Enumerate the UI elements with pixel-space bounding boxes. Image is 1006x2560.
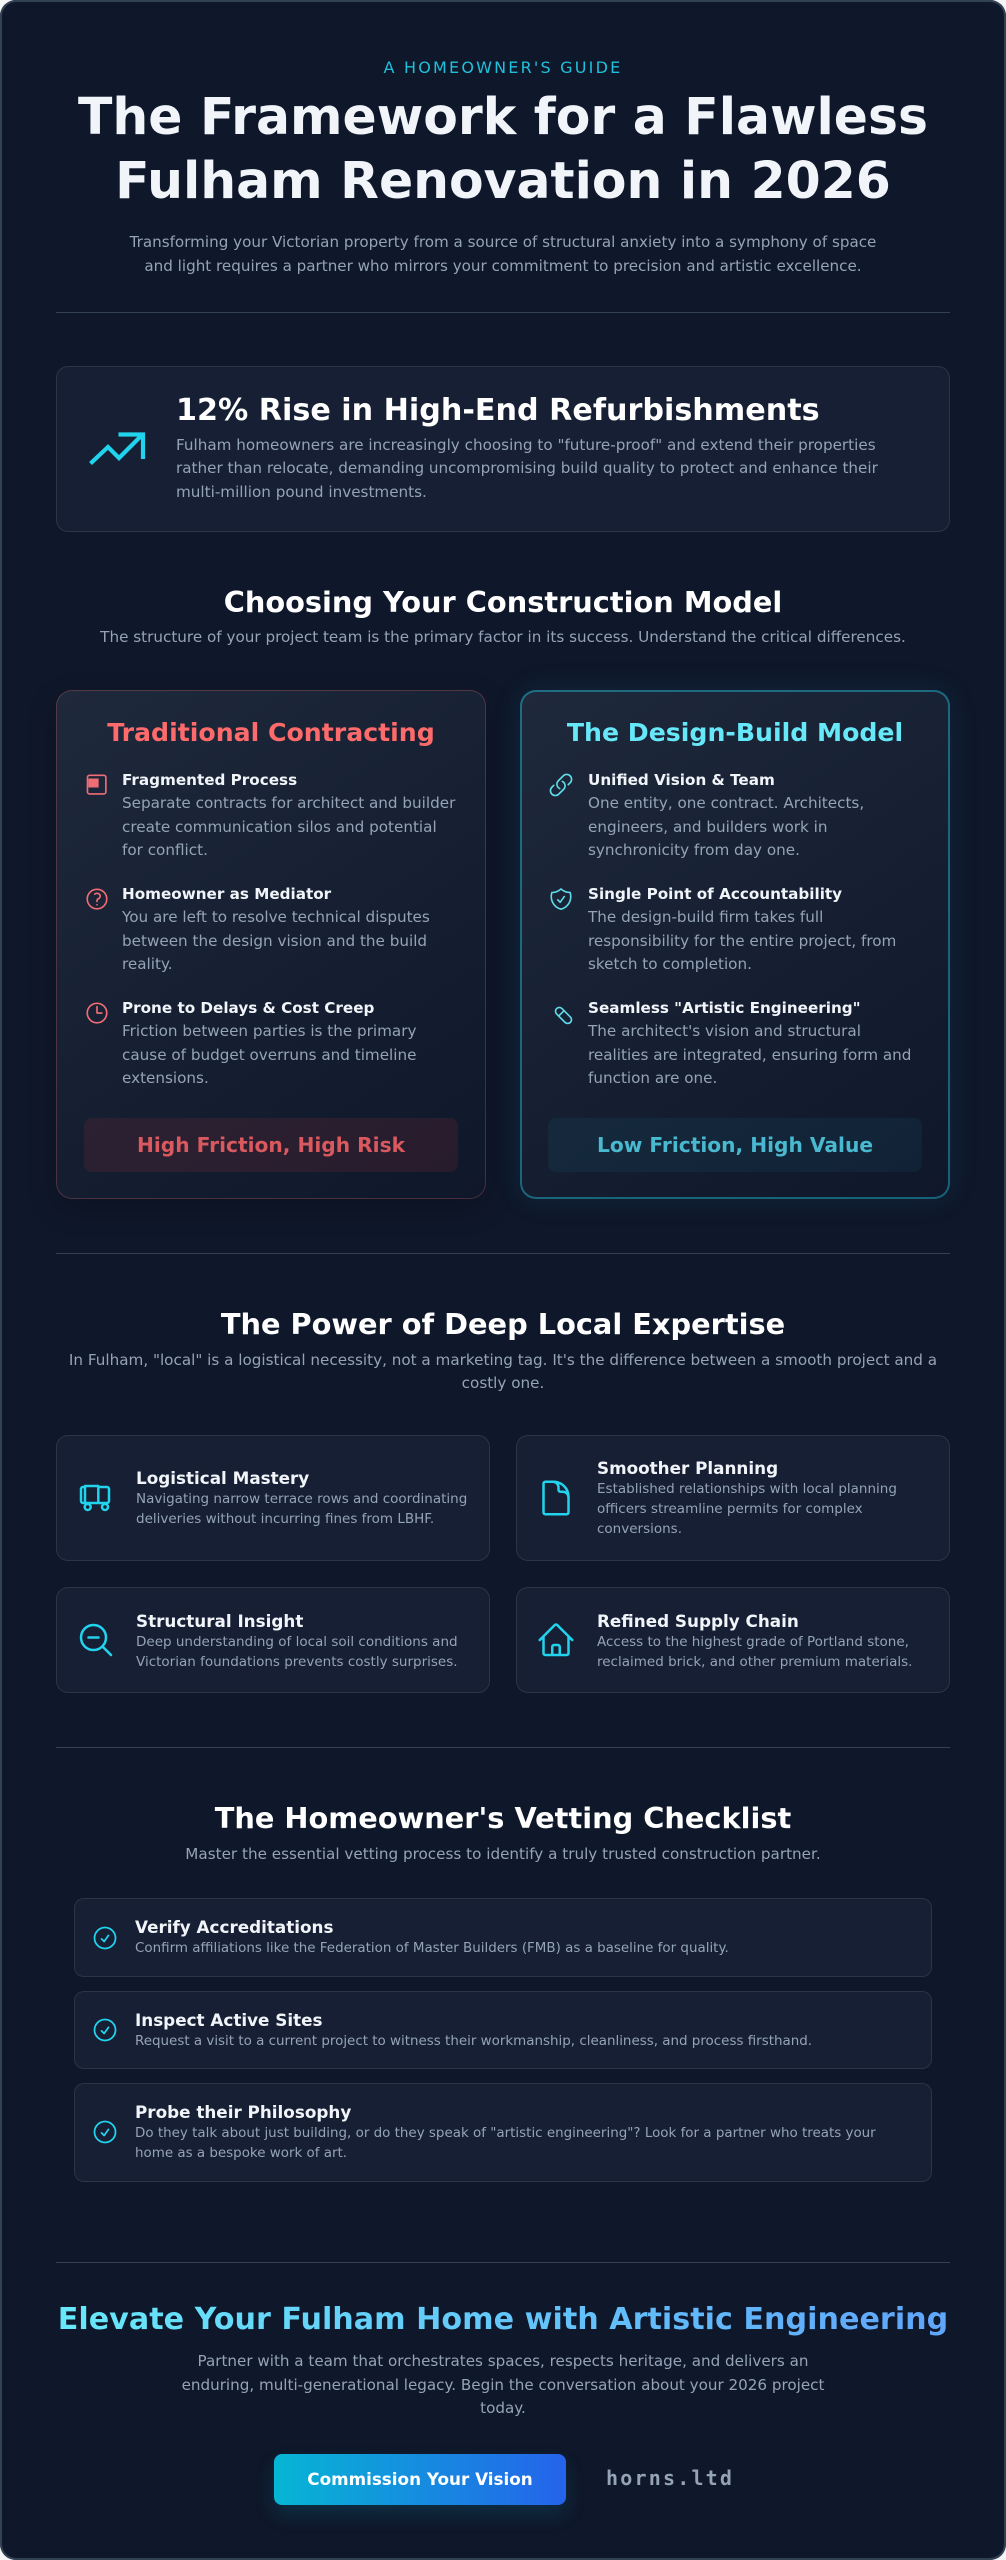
item: single point of accountability: [550, 885, 896, 973]
item: single point of accountability: The design-build firm takes full: [588, 908, 823, 926]
item: fragmented process: for conflict.: [122, 841, 208, 859]
intro text: [130, 233, 876, 274]
panel: logistical mastery: deliveries without incurring fines from LBHF.: [136, 1511, 434, 1527]
panel: logistical mastery: Logistical Mastery: [136, 1468, 309, 1488]
statistic description: rather than relocate, demanding uncompromising build quality to protect and enhance their: [176, 459, 878, 477]
statistic description: multi-million pound investments.: [176, 483, 427, 501]
item: fragmented process: create communication silos and potential: [122, 818, 437, 836]
checklist item: probe their philosophy: home as a bespoke work of art.: [135, 2146, 347, 2161]
heading: local expertise: The Power of Deep Local Expertise: [221, 1307, 785, 1341]
intro text: Transforming your Victorian property from a source of structural anxiety into a symphony of space: [130, 233, 876, 251]
checklist item: inspect active sites: Request a visit to a current project to witness their workmanship, cleanliness, and process firsthand.: [135, 2034, 812, 2049]
statistic description: Fulham homeowners are increasingly choosing to "future-proof" and extend their properties: [176, 436, 876, 454]
item: fragmented process: [86, 771, 456, 859]
statistic description: [176, 436, 878, 501]
panel: refined supply chain: [516, 1587, 950, 1693]
panel: refined supply chain: Access to the highest grade of Portland stone,: [597, 1634, 909, 1650]
panel: structural insight: Victorian foundations prevents costly surprises.: [136, 1654, 458, 1670]
badge: low friction: Low Friction, High Value: [597, 1133, 873, 1157]
panel: refined supply chain: Refined Supply Chain: [597, 1611, 799, 1631]
item: unified vision: [550, 771, 864, 859]
statistic heading: 12% Rise in High-End Refurbishments: [176, 393, 820, 428]
item: homeowner as mediator: reality.: [122, 955, 173, 973]
item: delays and cost creep: cause of budget overruns and timeline: [122, 1046, 416, 1064]
heading: vetting checklist: The Homeowner's Vetting Checklist: [215, 1801, 791, 1835]
panel: smoother planning: officers streamline permits for complex: [597, 1501, 863, 1517]
panel: structural insight: Deep understanding of local soil conditions and: [136, 1634, 458, 1650]
icon: trending up arrow: [89, 432, 146, 465]
icon: fragmented: [86, 774, 107, 795]
panel: smoother planning: [516, 1435, 950, 1561]
item: homeowner as mediator: between the design vision and the build: [122, 932, 427, 950]
icon: pill: [554, 1006, 572, 1024]
call to action text: today.: [480, 2399, 526, 2417]
panel: structural insight: Structural Insight: [136, 1611, 303, 1631]
item: delays and cost creep: Prone to Delays & Cost Creep: [122, 999, 374, 1017]
panel: smoother planning: conversions.: [597, 1521, 682, 1537]
brand wordmark: horns.ltd: [606, 2466, 734, 2490]
call to action text: [182, 2352, 824, 2417]
item: artistic engineering: The architect's vision and structural: [588, 1022, 861, 1040]
icon: house: [538, 1623, 574, 1656]
call to action text: enduring, multi-generational legacy. Begin the conversation about your 2026 project: [182, 2376, 824, 2394]
item: unified vision: engineers, and builders work in: [588, 818, 827, 836]
icon: link: [550, 774, 572, 796]
item: artistic engineering: Seamless "Artistic Engineering": [588, 999, 861, 1017]
icon: check circle: [94, 2018, 116, 2042]
checklist item: probe their philosophy: [74, 2083, 932, 2182]
eyebrow: A HOMEOWNER'S GUIDE: [384, 58, 622, 76]
intro text: and light requires a partner who mirrors your commitment to precision and artistic excellence.: [144, 256, 862, 274]
checklist item: inspect active sites: [74, 1991, 932, 2069]
heading: traditional contracting: Traditional Contracting: [107, 718, 435, 747]
icon: shield check: [550, 888, 572, 910]
icon: check circle: [94, 1926, 116, 1950]
item: unified vision: One entity, one contract. Architects,: [588, 794, 864, 812]
panel: structural insight: [56, 1587, 490, 1693]
icon: check circle: [94, 2120, 116, 2144]
item: artistic engineering: function are one.: [588, 1069, 717, 1087]
checklist item: verify accreditations: [74, 1898, 932, 1977]
subheading: local expertise: [69, 1351, 937, 1392]
panel: smoother planning: Established relationships with local planning: [597, 1481, 897, 1497]
panel: design-build model: [520, 690, 950, 1199]
panel: logistical mastery: Navigating narrow terrace rows and coordinating: [136, 1491, 467, 1507]
panel: logistical mastery: [56, 1435, 490, 1561]
button: commission your vision: [274, 2454, 566, 2505]
checklist item: verify accreditations: Confirm affiliations like the Federation of Master Builders (FMB) as a baseline for quality.: [135, 1941, 729, 1956]
call to action text: Partner with a team that orchestrates spaces, respects heritage, and delivers an: [198, 2352, 808, 2370]
item: fragmented process: Separate contracts for architect and builder: [122, 794, 455, 812]
panel: traditional contracting: [56, 690, 486, 1199]
item: unified vision: Unified Vision & Team: [588, 771, 775, 789]
item: unified vision: synchronicity from day one.: [588, 841, 800, 859]
item: homeowner as mediator: [86, 885, 430, 973]
checklist item: probe their philosophy: Do they talk about just building, or do they speak of "artistic engineering"? Look for a partner who treats your: [135, 2126, 876, 2141]
icon: question mark: [86, 888, 108, 910]
badge: high friction: High Friction, High Risk: [137, 1133, 405, 1157]
item: delays and cost creep: extensions.: [122, 1069, 209, 1087]
title: The Framework for a Flawless: [78, 87, 928, 146]
icon: document: [542, 1480, 570, 1516]
item: delays and cost creep: Friction between parties is the primary: [122, 1022, 416, 1040]
item: artistic engineering: [554, 999, 911, 1087]
icon: clock: [86, 1002, 108, 1024]
subheading: local expertise: costly one.: [462, 1374, 544, 1392]
item: single point of accountability: responsibility for the entire project, from: [588, 932, 896, 950]
title: Fulham Renovation in 2026: [115, 151, 891, 210]
item: artistic engineering: realities are integrated, ensuring form and: [588, 1046, 911, 1064]
item: single point of accountability: sketch to completion.: [588, 955, 752, 973]
subheading: vetting checklist: Master the essential vetting process to identify a truly trusted construction partner.: [185, 1845, 821, 1863]
checklist item: probe their philosophy: Probe their Philosophy: [135, 2102, 351, 2122]
item: fragmented process: Fragmented Process: [122, 771, 297, 789]
item: homeowner as mediator: You are left to resolve technical disputes: [122, 908, 430, 926]
badge: high friction: [84, 1118, 458, 1172]
panel: refined supply chain: reclaimed brick, and other premium materials.: [597, 1654, 912, 1670]
title: [78, 87, 928, 210]
item: delays and cost creep: [86, 999, 416, 1087]
item: homeowner as mediator: Homeowner as Mediator: [122, 885, 331, 903]
panel: market statistic: [56, 366, 950, 532]
icon: truck: [80, 1484, 110, 1512]
checklist item: verify accreditations: Verify Accreditations: [135, 1917, 333, 1937]
panel: smoother planning: Smoother Planning: [597, 1458, 778, 1478]
checklist item: inspect active sites: Inspect Active Sites: [135, 2010, 322, 2030]
item: single point of accountability: Single Point of Accountability: [588, 885, 842, 903]
call to action heading: Elevate Your Fulham Home with Artistic Engineering: [58, 2302, 948, 2337]
badge: low friction: [548, 1118, 922, 1172]
heading: design-build model: The Design-Build Model: [567, 718, 903, 747]
subheading: local expertise: In Fulham, "local" is a logistical necessity, not a marketing tag. It's the difference between a smooth project and a: [69, 1351, 937, 1369]
button: commission your vision: Commission Your Vision: [307, 2469, 533, 2489]
subheading: construction model: The structure of your project team is the primary factor in its success. Understand the critical differences.: [100, 628, 906, 646]
icon: magnifying glass: [80, 1624, 112, 1656]
heading: construction model: Choosing Your Construction Model: [224, 585, 782, 619]
